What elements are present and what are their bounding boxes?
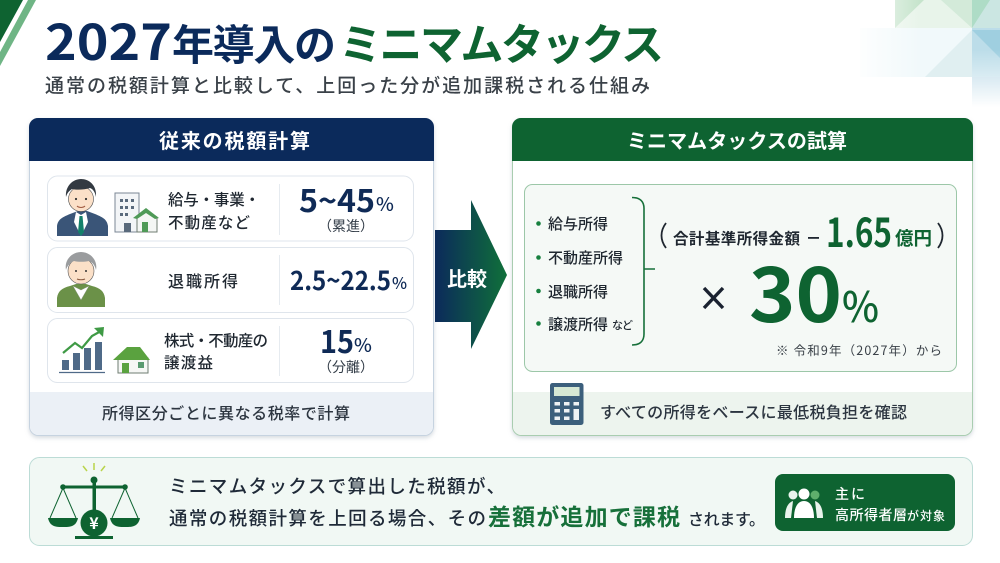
income list: 譲渡所得 [548, 314, 608, 334]
income list: 退職所得 [548, 281, 608, 302]
bracket [632, 198, 655, 345]
corner decoration: top right [850, 0, 1000, 107]
income list: 給与所得 [548, 213, 608, 234]
label: salary, business, real estate [168, 188, 260, 233]
summary text [169, 473, 765, 532]
summary text: ミニマムタックスで算出した税額が、 [169, 473, 505, 499]
rate: 15% [318, 317, 374, 377]
title: 年導入の [172, 12, 336, 73]
income list: など [612, 317, 633, 333]
rate: 5-45%: % [376, 190, 394, 217]
rate: 15%: 15 [320, 317, 354, 362]
multiply 30 percent: % [842, 274, 879, 335]
panel header: conventional: 従来の税額計算 [159, 125, 310, 154]
arrow: compare [435, 200, 507, 349]
rate: 15%: % [354, 331, 372, 358]
income list [536, 213, 633, 334]
icon: people [785, 488, 823, 518]
icon: rising chart [59, 327, 105, 372]
title [45, 4, 664, 75]
row: capital gains [48, 317, 414, 382]
panel: bottom summary [30, 458, 972, 546]
icon: elderly man [57, 252, 105, 307]
formula: income minus 1.65 oku yen [662, 201, 942, 259]
panel footer: conventional [30, 392, 433, 435]
arrow: compare: 比較 [447, 263, 487, 292]
panel header: minimum tax: ミニマムタックスの試算 [627, 125, 847, 154]
label: retirement income: 退職所得 [168, 268, 238, 292]
income list: 不動産所得 [548, 247, 623, 268]
title: 2027 [45, 4, 172, 75]
icon: scales with yen [48, 463, 140, 539]
multiply 30 percent: 30 [749, 237, 842, 344]
summary text: 通常の税額計算を上回る場合、その [169, 505, 486, 531]
corner decoration: top left [0, 0, 36, 66]
icon: building and house [115, 193, 159, 232]
panel: minimum tax calculation [512, 118, 973, 436]
subtitle: 通常の税額計算と比較して、上回った分が追加課税される仕組み [45, 71, 650, 98]
panel: conventional tax calculation [29, 118, 434, 436]
rate: 5-45% [299, 176, 394, 236]
panel header: conventional [29, 118, 434, 161]
note: from 2027: ※ 令和9年（2027年）から [776, 340, 942, 359]
badge text: 高所得者層 [835, 505, 907, 525]
badge text [835, 484, 945, 525]
icon: businessman [57, 179, 108, 236]
icon: house [113, 347, 150, 373]
label: capital gains [164, 329, 268, 373]
panel header: minimum tax [512, 118, 973, 161]
formula: income minus 1.65 oku yen: 億円 [895, 225, 932, 251]
row: retirement income [48, 248, 414, 312]
label: capital gains: 株式・不動産の [164, 329, 268, 351]
footer text: minimum tax: すべての所得をベースに最低税負担を確認 [600, 399, 907, 423]
rate: 5-45%: （累進） [318, 216, 374, 236]
badge text: が対象 [907, 507, 945, 524]
icon: scales with yen: ¥ [89, 510, 99, 534]
rate: 5-45%: 5~45 [299, 176, 375, 221]
footer text: conventional: 所得区分ごとに異なる税率で計算 [102, 400, 350, 424]
badge text: 主に [835, 484, 865, 504]
label: salary, business, real estate: 不動産など [168, 211, 250, 233]
formula: income minus 1.65 oku yen: 1.65 [826, 201, 892, 259]
summary text: 差額が追加で課税 [488, 498, 680, 532]
rate: 2.5-22.5%: 2.5~22.5 [290, 261, 391, 298]
row: salary, business, real estate [48, 176, 414, 241]
title: ミニマムタックス [339, 11, 664, 73]
label: salary, business, real estate: 給与・事業・ [168, 188, 260, 210]
formula: income minus 1.65 oku yen: 合計基準所得金額 [673, 227, 800, 249]
icon: calculator [550, 383, 584, 425]
label: capital gains: 譲渡益 [164, 351, 213, 373]
panel footer: minimum tax [513, 392, 972, 435]
formula box [524, 184, 956, 372]
rate: 2.5-22.5%: % [392, 270, 407, 294]
badge: high income earners [775, 474, 955, 531]
multiply 30 percent [704, 237, 879, 344]
summary text: されます。 [688, 506, 765, 530]
rate: 15%: （分離） [318, 357, 374, 377]
